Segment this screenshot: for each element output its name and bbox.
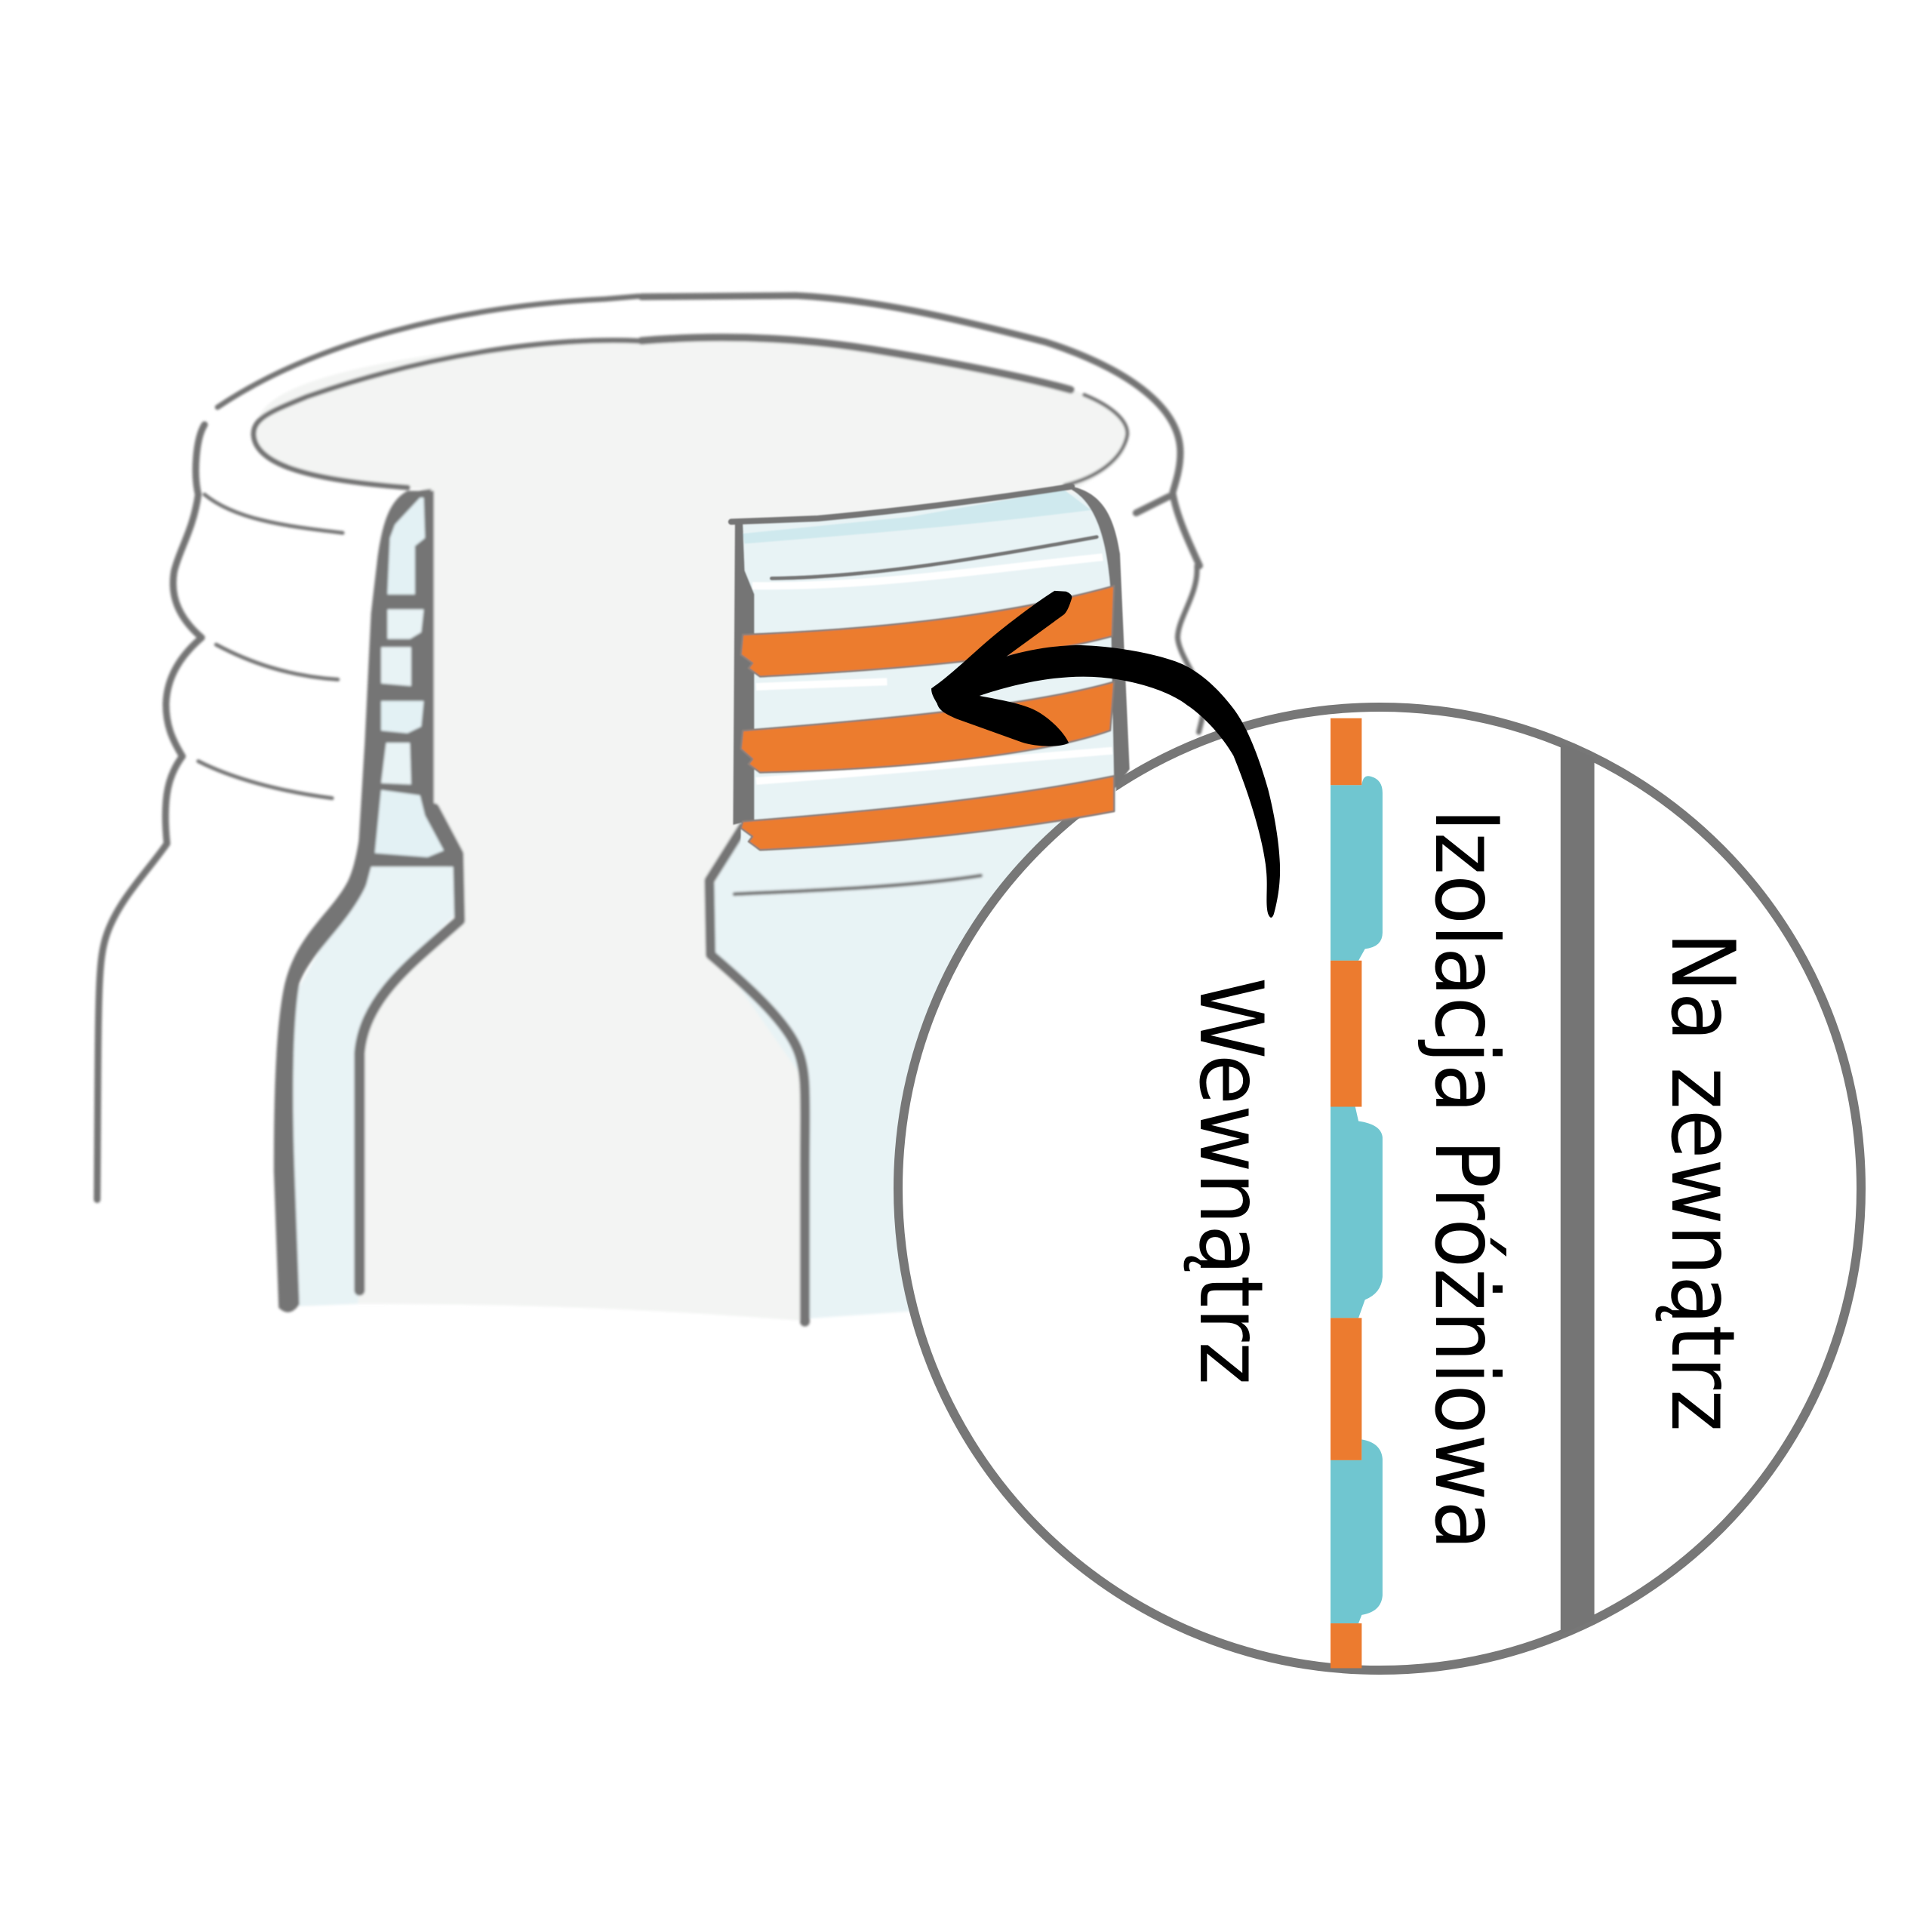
threaded neck with orange bands	[731, 487, 1130, 850]
right thread top edge	[731, 487, 1072, 521]
rim top line left	[217, 297, 638, 408]
outer rim	[97, 297, 638, 1312]
bottle interior	[255, 339, 1128, 1321]
right rim	[641, 296, 1200, 566]
left wall fill	[286, 493, 458, 1306]
neck cell three	[381, 647, 411, 686]
orange band two	[741, 681, 1114, 773]
left inner wall	[359, 809, 460, 1291]
outer contour below neck on the right	[1177, 566, 1204, 732]
outer shoulder contour	[97, 425, 205, 1200]
teal vacuum block one	[1331, 776, 1383, 961]
magnifier circle	[898, 707, 1861, 1670]
label: outside: Na zewnątrz	[1651, 932, 1753, 1432]
neck cell five	[381, 743, 411, 784]
rim lip tick	[1136, 497, 1169, 513]
label: vacuum insulation: Izolacja Próżniowa	[1415, 808, 1517, 1550]
orange segment four	[1331, 1623, 1361, 1668]
neck cell two	[387, 609, 424, 639]
inner rim top right	[641, 337, 1071, 389]
neck cell six	[375, 790, 444, 857]
orange segment one	[1331, 718, 1361, 785]
thread line three	[198, 761, 332, 798]
right inner wall	[709, 827, 805, 1321]
inner rim left	[254, 340, 638, 488]
thread line one	[205, 494, 343, 533]
shoulder seam	[734, 875, 981, 894]
neck seam	[374, 857, 451, 863]
arrow	[931, 591, 1280, 918]
grey outer wall	[1561, 743, 1595, 1635]
neck lower fill	[365, 866, 448, 891]
thread wall fill	[741, 497, 1116, 850]
bottle illustration	[97, 296, 1204, 1321]
orange band one	[741, 586, 1114, 677]
right wall fill	[712, 493, 1115, 1318]
thread line two	[216, 645, 338, 679]
neck cell one	[387, 497, 425, 595]
thread inner line	[771, 537, 1097, 578]
teal vacuum block two	[1331, 1107, 1383, 1318]
left outer wall	[274, 489, 432, 1312]
orange segment two	[1331, 961, 1361, 1107]
orange segment three	[1331, 1318, 1361, 1460]
left neck cross-section	[357, 491, 460, 891]
rim top line right	[641, 296, 1200, 566]
neck dark body	[357, 491, 460, 866]
right thread wall	[1072, 487, 1130, 789]
neck cell four	[381, 701, 424, 734]
label: inside: Wewnątrz	[1180, 977, 1281, 1385]
teal vacuum block three	[1331, 1439, 1383, 1623]
insulation diagram layers	[1331, 718, 1595, 1668]
right neck shoulder	[709, 827, 981, 1321]
left thread wall	[733, 521, 754, 825]
cyan top tint	[743, 490, 1091, 543]
outer neck wave	[1177, 566, 1204, 732]
orange band three	[741, 776, 1114, 850]
white highlights	[752, 557, 1112, 781]
inner rim front	[1065, 395, 1128, 485]
